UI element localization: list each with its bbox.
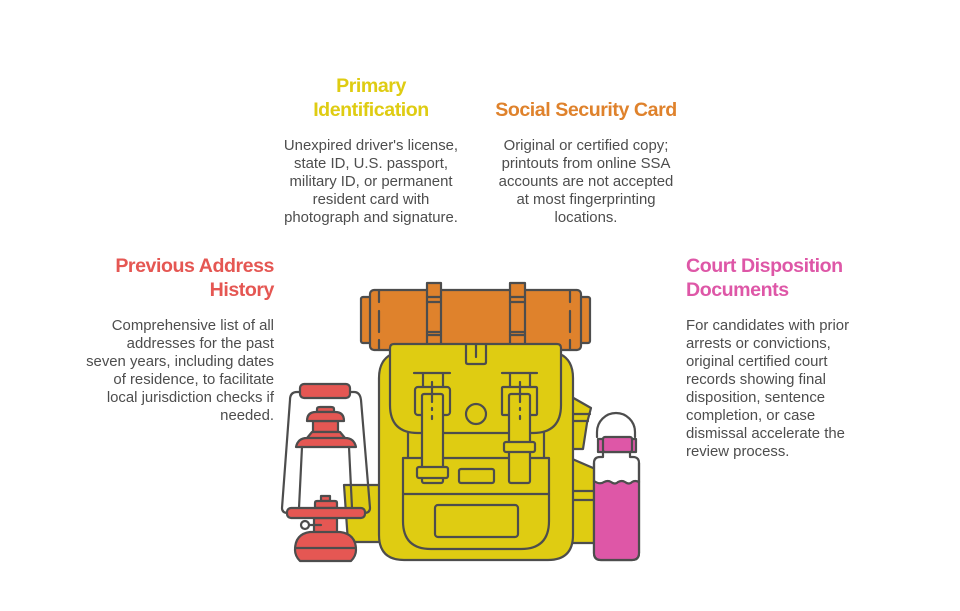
heading: Court Disposition Documents: Court Disposition (686, 255, 843, 277)
text: Previous Address History description: of residence, to facilitate (113, 372, 274, 388)
text: Primary Identification description: resident card with (313, 192, 429, 208)
heading: Primary Identification: Identification (313, 99, 429, 121)
heading and text: Primary Identification (284, 75, 458, 226)
text: Previous Address History description: local jurisdiction checks if (107, 390, 274, 406)
text: Social Security Card description: locations. (555, 210, 617, 226)
text: Previous Address History description (86, 318, 274, 424)
text: Previous Address History description: needed. (220, 408, 274, 424)
top flap (390, 344, 561, 433)
right strap (502, 373, 537, 387)
text: Primary Identification description: Unexpired driver's license, (284, 138, 458, 154)
text: Primary Identification description: state ID, U.S. passport, (294, 156, 448, 172)
text: Court Disposition Documents description: For candidates with prior (686, 318, 849, 334)
heading: Court Disposition Documents (686, 255, 843, 301)
text: Primary Identification description (284, 138, 458, 226)
text: Court Disposition Documents description: completion, or case (686, 408, 815, 424)
icon: water bottle (594, 413, 639, 560)
text: Social Security Card description (499, 138, 673, 226)
left strap (414, 373, 450, 387)
text: Previous Address History description: addresses for the past (127, 336, 274, 352)
text: Social Security Card description: Original or certified copy; (504, 138, 668, 154)
text: Primary Identification description: photograph and signature. (284, 210, 458, 226)
heading and text: Social Security Card (495, 99, 677, 226)
text: Social Security Card description: printouts from online SSA (502, 156, 670, 172)
text: Court Disposition Documents description: original certified court (686, 354, 828, 370)
icon: lantern (282, 384, 370, 561)
heading and text: Court Disposition Documents (686, 255, 849, 460)
text: Previous Address History description: seven years, including dates (86, 354, 274, 370)
text: Previous Address History description: Comprehensive list of all (112, 318, 274, 334)
text: Primary Identification description: military ID, or permanent (289, 174, 453, 190)
text: Court Disposition Documents description: review process. (686, 444, 789, 460)
text: Social Security Card description: at most fingerprinting (516, 192, 656, 208)
text: Court Disposition Documents description: records showing final (686, 372, 826, 388)
heading: Previous Address History: Previous Address (115, 255, 274, 277)
heading and text: Previous Address History (86, 255, 274, 424)
text: Social Security Card description: accounts are not accepted (499, 174, 673, 190)
text: Court Disposition Documents description: dismissal accelerate the (686, 426, 845, 442)
heading: Previous Address History (115, 255, 274, 301)
front pocket (403, 458, 549, 549)
text: Court Disposition Documents description: arrests or convictions, (686, 336, 831, 352)
icon: backpack body (379, 344, 573, 560)
heading: Primary Identification: Primary (336, 75, 406, 97)
top tab (466, 344, 486, 364)
icon: bedroll (361, 283, 590, 350)
heading: Previous Address History: History (210, 279, 274, 301)
text: Court Disposition Documents description (686, 318, 849, 460)
heading: Court Disposition Documents: Documents (686, 279, 789, 301)
heading: Primary Identification (313, 75, 429, 121)
heading: Social Security Card: Social Security Card (495, 99, 677, 121)
text: Court Disposition Documents description: disposition, sentence (686, 390, 825, 406)
icon: side pockets of backpack (344, 396, 605, 543)
